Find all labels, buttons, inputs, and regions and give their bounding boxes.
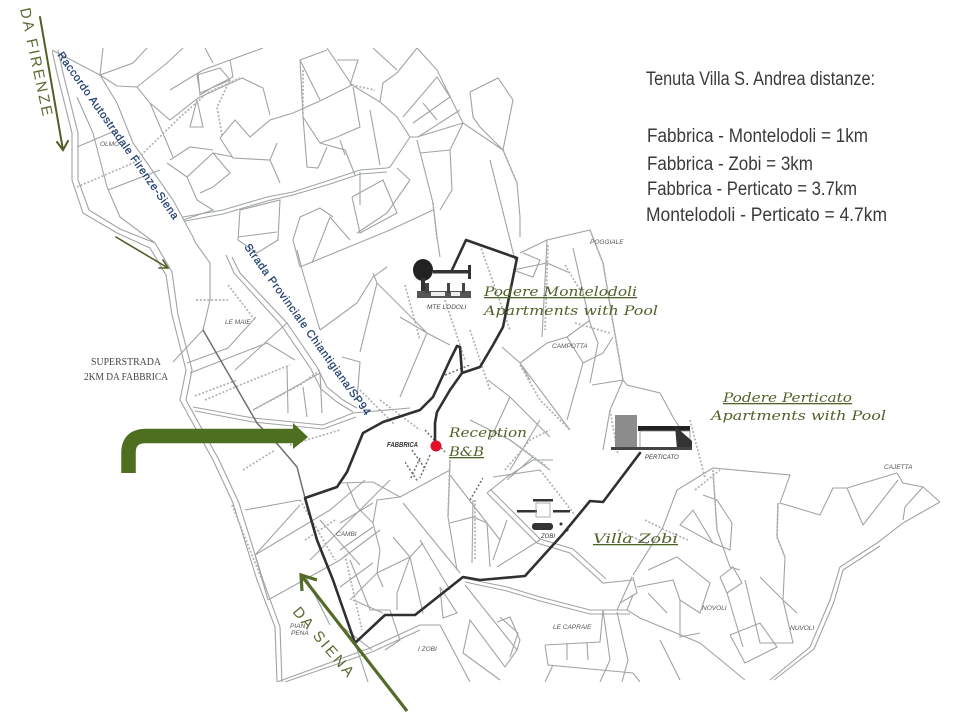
superstrada note: 2KM DA FABBRICA [84,372,168,383]
small map place names: LE CAPRAIE [553,624,592,631]
icon: Perticato farmhouse: PERTICATO [645,455,679,461]
road label: Strada Provinciale: Strada Provinciale Chiantigiana/SP94 [242,242,373,418]
small map place names: CAJETTA [884,464,912,471]
small map place names: CAMBI [336,531,357,538]
small map place names: NUVOLI [790,625,814,632]
Fabbrica village speckle [405,365,483,500]
arrow: from Siena [301,575,407,711]
label: Villa Zobi: Villa Zobi [593,532,678,547]
arrow: big green exit arrow [128,423,308,473]
label: Podere Perticato: Apartments with Pool [710,409,886,424]
small map place names: NOVOLI [702,605,727,612]
label: DA SIENA: DA SIENA [289,604,357,680]
small map place names [100,141,912,653]
label: Podere Montelodoli [483,285,658,319]
icon: Montelodoli farmhouse: MTE LODOLI [427,304,467,311]
heading: distances: Tenuta Villa S. Andrea distanze: [646,69,875,90]
small map place names: PENA [291,630,309,637]
road label: Raccordo: Raccordo Autostradale Firenze-Siena [55,50,181,223]
label: Reception B&B [448,426,527,460]
heading: distances [646,69,887,226]
marker: reception red dot [430,440,442,452]
handwritten place labels [448,285,886,547]
grey minor road [203,330,305,498]
distance list: Montelodoli - Perticato = 4.7km [646,205,887,226]
icon: Perticato farmhouse [611,415,692,461]
icon: Villa Zobi: ZOBI [540,534,555,540]
small map place names: OLMO [100,141,119,148]
dotted parcel boundaries [77,70,785,630]
label: Reception B&B: B&B [448,445,484,460]
small map place names: I ZOBI [418,646,437,653]
label: Podere Perticato: Podere Perticato [722,391,852,406]
label: Reception B&B: Reception [448,426,527,441]
label: Podere Montelodoli: Apartments with Pool [483,304,658,319]
icon: Montelodoli farmhouse [413,259,471,311]
small map place names: CAMPOTTA [552,343,588,350]
label: DA FIRENZE: DA FIRENZE [16,6,56,117]
label: Fabbrica: FABBRICA [387,440,418,449]
small map place names: POGGIALE [590,239,624,246]
superstrada note [84,357,168,383]
icon: Villa Zobi [517,499,570,540]
label: Podere Montelodoli: Podere Montelodoli [483,285,637,300]
arrow: from Firenze [40,17,68,150]
route: dark road to Montelodoli and Fabbrica [305,240,640,643]
distance list: Fabbrica - Perticato = 3.7km [647,179,857,200]
arrow: motorway exit [116,237,168,268]
small map place names: PIAN [290,623,305,630]
distance list: Fabbrica - Montelodoli = 1km [647,126,868,147]
superstrada note: SUPERSTRADA [91,357,161,368]
distance list [646,126,887,226]
small map place names: LE MAIE [225,319,251,326]
distance list: Fabbrica - Zobi = 3km [647,154,813,175]
route: dark road to Zobi and Perticato [355,453,640,643]
label: Podere Perticato [710,391,886,424]
